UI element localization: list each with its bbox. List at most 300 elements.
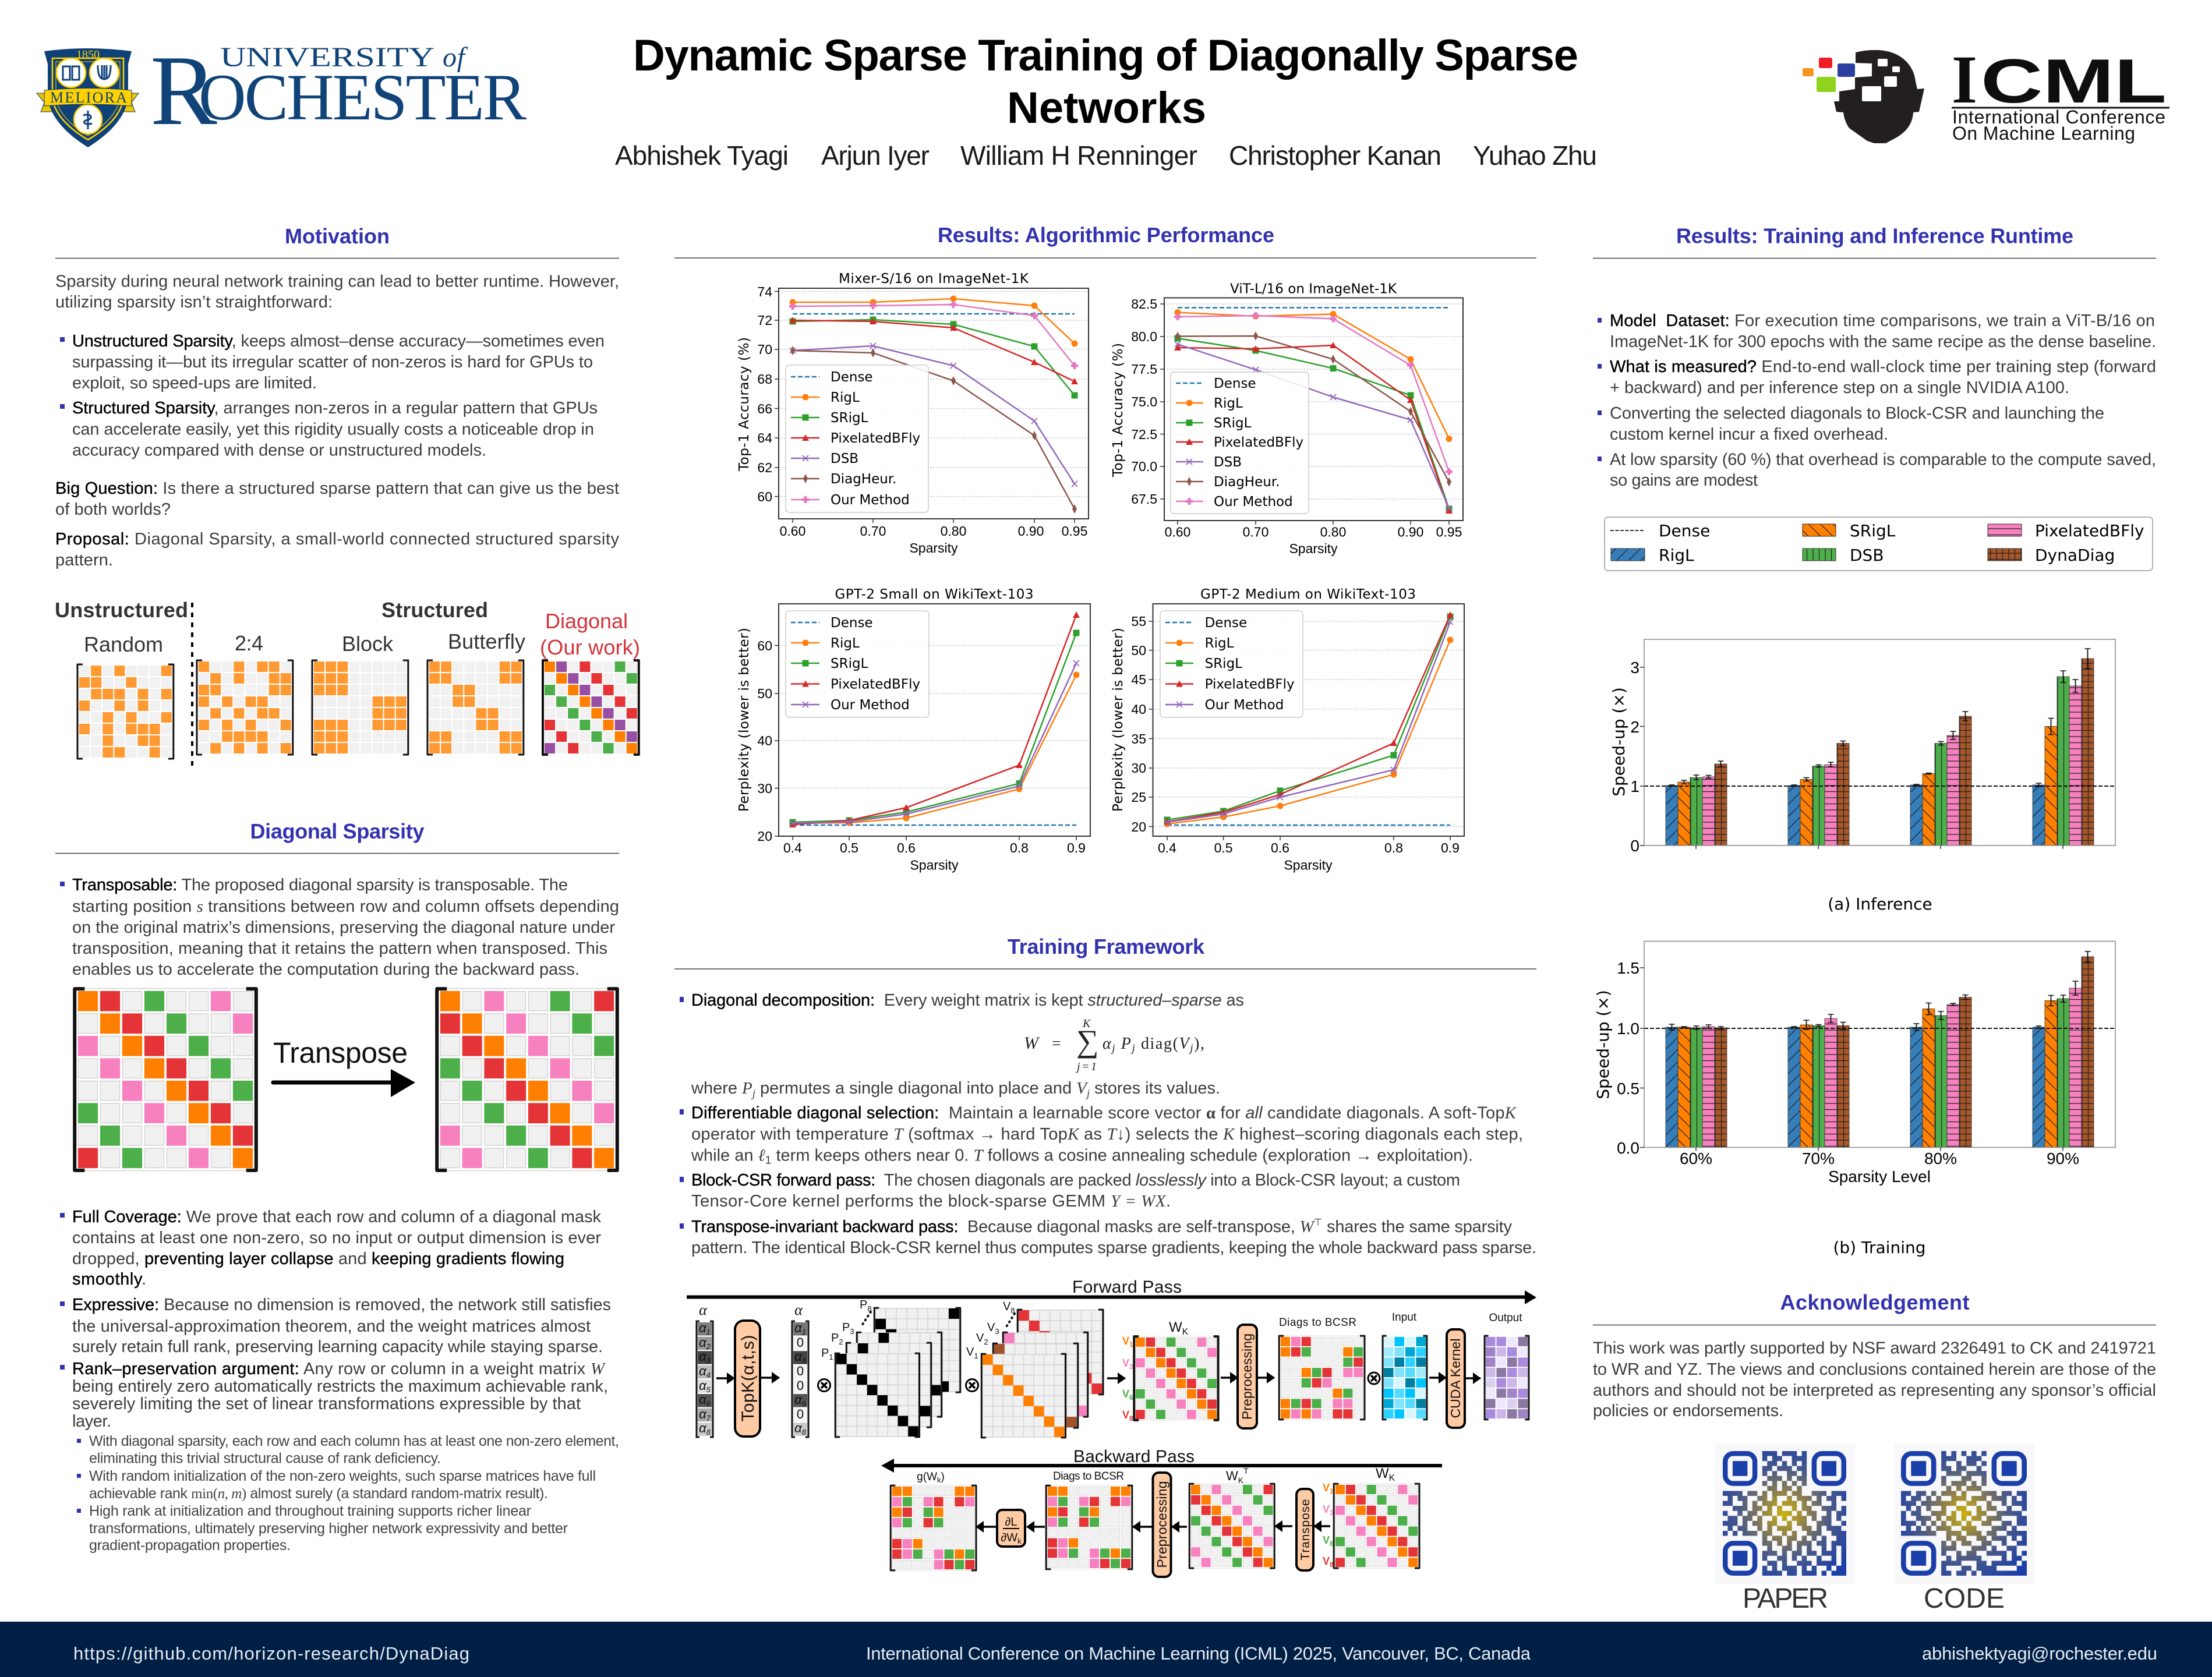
legend: PixelatedBFly: [1205, 677, 1295, 692]
matrix: W_K transpose: [1189, 1466, 1274, 1568]
heading: training and inference runtime: Results: Training and Inference Runtime: [1676, 224, 2073, 248]
matrix: output: [1485, 1312, 1529, 1420]
bullet: transposable: transposition, meaning that it retains the pattern when transposed. This: [72, 939, 607, 958]
stack: permutation matrices: 8: [867, 1304, 872, 1313]
equation: W decomposition: j: [1130, 1042, 1135, 1055]
equation: W decomposition: j: [1188, 1042, 1193, 1055]
chart: ViT-L/16 on ImageNet-1K: [1111, 282, 1463, 556]
chart: inference speed-up: 0: [1630, 837, 1639, 855]
chart: GPT-2 Medium on WikiText-103: Perplexity (lower is better): [1111, 628, 1126, 812]
footer: email: abhishektyagi@rochester.edu: [1922, 1643, 2157, 1664]
bullet: differentiable diagonal selection: Differentiable diagonal selection: Maintain a learnable score vector α for all candidate diagonals. A soft-TopK: [691, 1104, 1517, 1123]
operator: tensor product: [818, 1379, 831, 1392]
bullet: differentiable diagonal selection: 1: [765, 1154, 771, 1167]
chart: Mixer-S/16 on ImageNet-1K: 64: [757, 430, 772, 445]
selected alpha vector: [792, 1301, 808, 1437]
alpha vector: 2: [706, 1342, 711, 1351]
matrix: diagonal: [543, 660, 639, 755]
legend: SRigL: [831, 411, 868, 426]
bullet: expressive: [60, 1296, 611, 1356]
chart: GPT-2 Small on WikiText-103: 50: [757, 686, 772, 701]
figure: sparsity patterns: [55, 598, 640, 767]
stack: value matrices: 3: [995, 1327, 999, 1336]
box: preprocessing: [1238, 1325, 1257, 1428]
matrix: W_K backward: V: [1323, 1534, 1330, 1546]
label: unstructured: Unstructured: [55, 598, 188, 622]
bullet: differentiable diagonal selection: operator with temperature T (softmax → hard TopK as T↓) selects the K highest–scoring diagonals each step,: [691, 1125, 1523, 1144]
chart: Mixer-S/16 on ImageNet-1K: 68: [757, 372, 772, 387]
matrix: gradient g(W_k): k: [937, 1476, 941, 1484]
matrix: W_K transpose: T: [1243, 1466, 1249, 1476]
alpha vector: α: [699, 1421, 707, 1435]
authors: [615, 140, 1597, 171]
matrix: W_K transpose: W: [1226, 1469, 1238, 1483]
arrow: [1027, 1526, 1045, 1528]
stack: permutation matrices: P: [821, 1347, 829, 1360]
chart: GPT-2 Small on WikiText-103: Perplexity (lower is better): [737, 628, 752, 812]
bullet: rank preservation: Rank–preservation argument: Any row or column in a weight matrix W: [72, 1360, 606, 1378]
chart: GPT-2 Medium on WikiText-103: 0.4: [1158, 840, 1176, 855]
chart: GPT-2 Medium on WikiText-103: 35: [1131, 731, 1146, 746]
stack: value matrices: V: [966, 1346, 974, 1358]
chart: Mixer-S/16 on ImageNet-1K: 72: [757, 313, 772, 328]
chart: ViT-L/16 on ImageNet-1K: 75.0: [1131, 394, 1157, 409]
chart: inference speed-up: 3: [1630, 659, 1639, 677]
bullet: full coverage: contains at least one non-zero, so no input or output dimension is ever: [72, 1229, 601, 1247]
matrix: W_K: V: [1122, 1357, 1129, 1369]
chart: training speed-up: 1.0: [1617, 1020, 1639, 1038]
box: TopK: TopK(α,t,s): [738, 1335, 758, 1422]
matrix: butterfly: [427, 660, 524, 755]
chart: GPT-2 Medium on WikiText-103: 0.8: [1384, 840, 1403, 855]
text block: funding: authors and should not be interpreted as representing any sponsor’s official: [1593, 1381, 2156, 1400]
operator: tensor product: [1368, 1372, 1380, 1384]
text block: where clause: j: [1085, 1088, 1090, 1100]
legend: runtime methods: SRigL: [1850, 521, 1896, 540]
bullet: block-csr forward pass: [680, 1171, 1460, 1211]
matrix: block: [312, 660, 408, 755]
box: TopK: [735, 1321, 760, 1437]
matrix: W_K: 3: [1129, 1363, 1133, 1371]
bullet: block-csr forward pass: Tensor-Core kernel performs the block-sparse GEMM Y = WX.: [691, 1192, 1171, 1211]
icon: shield: 1850: [76, 48, 100, 61]
legend: [786, 611, 929, 717]
chart: Mixer-S/16 on ImageNet-1K: 62: [757, 460, 772, 475]
title: [633, 31, 1578, 133]
footer: repository link: https://github.com/horizon-research/DynaDiag: [73, 1643, 469, 1664]
stack: permutation matrices: P: [831, 1332, 839, 1345]
chart: ViT-L/16 on ImageNet-1K: 0.60: [1165, 524, 1190, 539]
bullet: rank preservation: layer.: [72, 1412, 111, 1431]
arrow: [1314, 1525, 1330, 1527]
legend: runtime methods: RigL: [1659, 546, 1694, 565]
bullet: full coverage: smoothly.: [72, 1270, 146, 1289]
legend: Our Method: [1214, 494, 1293, 510]
matrix: diags to BCSR backward: [1046, 1470, 1132, 1569]
bullet: conversion overhead: Converting the selected diagonals to Block-CSR and launching the: [1610, 404, 2104, 423]
chart: GPT-2 Medium on WikiText-103: 55: [1131, 614, 1146, 629]
arrow: [1257, 1377, 1274, 1379]
legend: Our Method: [831, 698, 910, 713]
legend: RigL: [831, 390, 860, 405]
text block: funding: policies or endorsements.: [1593, 1402, 1783, 1420]
title: Dynamic Sparse Training of Diagonally Sparse: [633, 31, 1578, 80]
legend: RigL: [1205, 636, 1234, 651]
selected alpha vector: 0: [797, 1364, 804, 1378]
alpha vector: 4: [706, 1371, 711, 1379]
equation: W decomposition: j: [1110, 1042, 1115, 1055]
chart: ViT-L/16 on ImageNet-1K: 77.5: [1131, 362, 1157, 377]
equation: W decomposition: diag(: [1136, 1035, 1178, 1053]
matrix: input: Input: [1392, 1311, 1417, 1324]
chart: Mixer-S/16 on ImageNet-1K: 60: [757, 489, 772, 504]
label: random: Random: [84, 632, 163, 656]
chart: Mixer-S/16 on ImageNet-1K: 0.70: [860, 523, 886, 539]
heading: training framework: Training Framework: [1008, 935, 1205, 958]
wordmark: ICML I: I: [1952, 41, 1977, 118]
chart: ViT-L/16 on ImageNet-1K: Sparsity: [1289, 541, 1338, 556]
stack: permutation matrices: 1: [829, 1353, 833, 1361]
text block: funding: to WR and YZ. The views and conclusions contained herein are those of the: [1593, 1360, 2156, 1379]
legend: RigL: [831, 636, 860, 651]
bullet: block-csr forward pass: Block-CSR forward pass: The chosen diagonals are packed losslessly into a Block-CSR layout; a custom: [691, 1171, 1460, 1190]
bullet: structured sparsity: accuracy compared with dense or unstructured models.: [72, 441, 486, 460]
authors: Christopher Kanan: [1229, 140, 1441, 171]
label: transpose: Transpose: [273, 1036, 408, 1069]
label: butterfly: Butterfly: [448, 629, 525, 653]
alpha vector: α: [699, 1349, 707, 1364]
bullet: transpose-invariant backward pass: [680, 1217, 1536, 1257]
logo: University of Rochester: [37, 36, 527, 147]
label: backward pass: Backward Pass: [1073, 1447, 1195, 1466]
alpha vector: 7: [706, 1414, 711, 1423]
selected alpha vector: 8: [802, 1428, 807, 1437]
matrix: W_K backward: [1323, 1466, 1419, 1569]
text block: proposal: Proposal: Diagonal Sparsity, a small-world connected structured sparsity: [55, 530, 620, 549]
footer: conference: International Conference on Machine Learning (ICML) 2025, Vancouver, BC, Canada: [866, 1643, 1531, 1664]
bullet: transposable: starting position s transitions between row and column offsets depending: [72, 897, 619, 916]
box: transpose: [1296, 1489, 1313, 1570]
equation: W decomposition: K: [1082, 1017, 1091, 1030]
chart: training speed-up: 90%: [2047, 1149, 2079, 1167]
chart: GPT-2 Small on WikiText-103: 0.4: [783, 840, 802, 855]
arrow: [761, 1377, 779, 1379]
text block: where clause: V: [1076, 1079, 1090, 1100]
arrow: forward pass: [687, 1290, 1536, 1304]
matrix: 2:4: [197, 660, 293, 755]
chart: training speed-up: Sparsity Level: [1828, 1167, 1931, 1186]
matrix: W_K backward: V: [1323, 1482, 1330, 1494]
chart: GPT-2 Medium on WikiText-103: [1111, 587, 1464, 872]
selected alpha vector: 0: [797, 1378, 804, 1393]
legend: SRigL: [1214, 416, 1252, 431]
legend: Dense: [831, 615, 873, 631]
authors: William H Renninger: [960, 140, 1197, 171]
selected alpha vector: α: [794, 1421, 803, 1435]
text block: where clause: stores its values.: [1090, 1079, 1220, 1098]
bullet: low sparsity: [1598, 451, 2156, 490]
matrix: W_K: V: [1122, 1409, 1129, 1421]
text block: intro: Sparsity during neural network training can lead to better runtime. However,: [55, 273, 619, 291]
legend: Our Method: [831, 493, 910, 508]
chart: GPT-2 Small on WikiText-103: 0.5: [840, 840, 858, 855]
bullet: transposable: enables us to accelerate the computation during the backward pass.: [72, 960, 579, 979]
matrix: W_K backward: V: [1323, 1555, 1330, 1567]
alpha vector: 1: [706, 1328, 711, 1336]
chart: training speed-up: 70%: [1802, 1149, 1835, 1167]
matrix: W_K backward: W: [1376, 1466, 1389, 1481]
legend: PixelatedBFly: [1214, 435, 1303, 450]
heading: algorithmic performance: Results: Algorithmic Performance: [938, 223, 1274, 247]
stack: value matrices: 8: [1010, 1306, 1015, 1315]
arrow: [1133, 1526, 1153, 1528]
chart: training speed-up: 0.5: [1617, 1080, 1639, 1098]
caption: inference: (a) Inference: [1828, 894, 1932, 914]
stack: value matrices: V: [987, 1321, 995, 1334]
label: forward pass: Forward Pass: [1072, 1278, 1182, 1297]
bullet: diagonal decomposition: Diagonal decomposition: Every weight matrix is kept structured–sparse as: [691, 991, 1244, 1010]
selected alpha vector: 6: [802, 1399, 807, 1408]
bullet: what is measured: What is measured? End-to-end wall-clock time per training step (forward: [1610, 358, 2156, 376]
bullet: differentiable diagonal selection: while an ℓ: [691, 1146, 765, 1165]
text block: proposal: [55, 530, 620, 569]
chart: ViT-L/16 on ImageNet-1K: 67.5: [1131, 491, 1157, 507]
chart: ViT-L/16 on ImageNet-1K: 0.90: [1398, 524, 1423, 539]
chart: GPT-2 Small on WikiText-103: 0.9: [1067, 840, 1086, 855]
legend: [786, 365, 928, 512]
chart: training speed-up: 1.5: [1617, 959, 1639, 977]
matrix: transposed: [437, 989, 617, 1170]
text block: intro: [55, 273, 619, 312]
panel: header: [37, 31, 2169, 171]
arrow: [1107, 1377, 1125, 1379]
chart: Mixer-S/16 on ImageNet-1K: 0.95: [1062, 523, 1087, 539]
arrow: backward pass: [881, 1459, 1442, 1473]
wordmark: conference name: [1952, 107, 2165, 144]
equation: W decomposition: j=1: [1075, 1060, 1097, 1073]
legend: runtime methods: DSB: [1850, 546, 1884, 565]
label: paper: PAPER: [1743, 1583, 1828, 1614]
authors: Abhishek Tyagi: [615, 140, 789, 171]
alpha vector: α: [699, 1392, 707, 1407]
matrix: W_K: 1: [1129, 1340, 1133, 1349]
matrix: gradient g(W_k): [891, 1471, 976, 1570]
operator: tensor product: [966, 1379, 978, 1392]
bullet: structured sparsity: [60, 399, 598, 460]
bullet: transpose-invariant backward pass: shares the same sparsity: [1322, 1218, 1512, 1236]
bullet: transpose-invariant backward pass: ⊤: [1314, 1217, 1322, 1228]
QR code: paper: [1715, 1444, 1855, 1584]
chart: ViT-L/16 on ImageNet-1K: 0.70: [1243, 524, 1268, 539]
stack: value matrices: 1: [974, 1351, 978, 1360]
stack: value matrices: V: [976, 1332, 984, 1345]
chart: Mixer-S/16 on ImageNet-1K: 0.90: [1018, 523, 1044, 539]
legend: SRigL: [831, 656, 868, 671]
bullet: transposable: [60, 876, 619, 979]
stack: permutation matrices: 3: [850, 1327, 854, 1336]
bullet: differentiable diagonal selection: T follows a cosine annealing schedule (exploration → exploitation).: [974, 1146, 1473, 1165]
selected alpha vector: α: [794, 1392, 803, 1407]
chart: GPT-2 Medium on WikiText-103: 0.9: [1441, 840, 1460, 855]
chart: GPT-2 Medium on WikiText-103: 50: [1131, 643, 1146, 658]
bullet: differentiable diagonal selection: [680, 1104, 1523, 1167]
bullet: structured sparsity: Structured Sparsity, arranges non-zeros in a regular pattern that GPUs: [72, 399, 598, 418]
box: dL over dW_k: ∂W: [1001, 1531, 1017, 1544]
equation: W decomposition: [1024, 1017, 1204, 1073]
chart: Mixer-S/16 on ImageNet-1K: 74: [757, 284, 772, 299]
alpha vector: α: [699, 1301, 708, 1318]
legend: PixelatedBFly: [831, 677, 920, 692]
bullet: structured sparsity: can accelerate easily, yet this rigidity usually costs a noticeable drop in: [72, 420, 594, 439]
legend: RigL: [1214, 396, 1243, 411]
chart: ViT-L/16 on ImageNet-1K: Top-1 Accuracy (%): [1111, 343, 1126, 477]
equation: W decomposition: α: [1103, 1035, 1115, 1055]
legend: runtime methods: PixelatedBFly: [2035, 521, 2144, 540]
selected alpha vector: α: [794, 1349, 803, 1364]
chart: ViT-L/16 on ImageNet-1K: 0.95: [1436, 524, 1462, 539]
alpha vector: α: [699, 1321, 707, 1335]
text block: proposal: pattern.: [55, 551, 113, 569]
text block: where clause: permutes a single diagonal into place and: [755, 1079, 1076, 1098]
arrow: [1465, 1377, 1480, 1379]
matrix: original: [75, 989, 256, 1170]
alpha vector: α: [699, 1407, 707, 1421]
label: structured: Structured: [381, 598, 488, 622]
bullet: transposable: Transposable: The proposed diagonal sparsity is transposable. The: [72, 876, 568, 894]
matrix: output: Output: [1489, 1312, 1522, 1324]
wordmark: R: R: [150, 36, 217, 146]
chart: GPT-2 Small on WikiText-103: Sparsity: [910, 857, 959, 872]
label: diagonal, our work: [540, 609, 640, 659]
legend: DiagHeur.: [831, 472, 896, 487]
bullet: rank preservation: being entirely zero automatically restricts the maximum achievable rank,: [72, 1377, 608, 1396]
legend: Dense: [831, 370, 873, 385]
text block: where clause: j: [751, 1088, 755, 1100]
matrix: W_K backward: K: [1389, 1473, 1395, 1483]
chart: ViT-L/16 on ImageNet-1K: ViT-L/16 on ImageNet-1K: [1230, 282, 1397, 297]
legend: runtime methods: Dense: [1659, 521, 1710, 540]
equation: W decomposition: P: [1121, 1035, 1135, 1055]
arrow: [716, 1377, 734, 1379]
matrix: W_K: 6: [1129, 1393, 1133, 1402]
chart: Mixer-S/16 on ImageNet-1K: Top-1 Accuracy (%): [737, 337, 752, 472]
chart: ViT-L/16 on ImageNet-1K: 82.5: [1131, 296, 1157, 312]
chart: ViT-L/16 on ImageNet-1K: 0.80: [1320, 524, 1346, 539]
arrow: [1221, 1377, 1238, 1379]
panel: motivation: [55, 224, 640, 767]
legend: runtime methods: [1605, 517, 2153, 571]
box: CUDA kernel: CUDA Kernel: [1448, 1338, 1463, 1418]
arrow: transpose: [273, 1069, 415, 1097]
chart: inference speed-up: 2: [1630, 718, 1639, 736]
matrix: random: [77, 664, 174, 759]
chart: Mixer-S/16 on ImageNet-1K: Mixer-S/16 on ImageNet-1K: [839, 271, 1029, 286]
selected alpha vector: 3: [802, 1356, 807, 1365]
sub-bullets: rank details: [77, 1433, 619, 1554]
text block: intro: utilizing sparsity isn’t straightforward:: [55, 293, 333, 312]
bullet: what is measured: [1598, 358, 2156, 397]
chart: Mixer-S/16 on ImageNet-1K: 0.80: [941, 523, 966, 539]
box: transpose: Transpose: [1299, 1499, 1312, 1561]
box: CUDA kernel: [1447, 1329, 1465, 1428]
selected alpha vector: 0: [797, 1407, 804, 1421]
matrix: diags to BCSR: [1279, 1317, 1365, 1420]
matrix: input: [1383, 1311, 1427, 1420]
stack: permutation matrices: P: [860, 1299, 867, 1311]
sub-bullets: rank details: gradient-propagation properties.: [89, 1537, 291, 1554]
bullet: what is measured: + backward) and per inference step on a single NVIDIA A100.: [1610, 378, 2069, 397]
bullet: transposable: on the original matrix’s dimensions, preserving the diagonal nature under: [72, 918, 615, 937]
label: block: Block: [342, 632, 394, 656]
matrix: W_K transpose: K: [1238, 1476, 1244, 1485]
legend: DSB: [1214, 455, 1242, 470]
bullet: full coverage: Full Coverage: We prove that each row and column of a diagonal mask: [72, 1208, 601, 1226]
alpha vector: 8: [706, 1428, 711, 1437]
chart: Mixer-S/16 on ImageNet-1K: [737, 271, 1089, 556]
text block: big question: Big Question: Is there a structured sparse pattern that can give us the best: [55, 479, 619, 498]
equation: W decomposition: =: [1052, 1035, 1061, 1053]
legend: Dense: [1205, 615, 1247, 631]
legend: Dense: [1214, 376, 1256, 391]
bullet: conversion overhead: [1598, 404, 2104, 444]
wordmark: ochester: OCHESTER: [199, 61, 527, 134]
chart: ViT-L/16 on ImageNet-1K: 80.0: [1131, 329, 1157, 344]
wordmark: ICML CML: CML: [1981, 46, 2167, 116]
chart: GPT-2 Medium on WikiText-103: 25: [1131, 790, 1146, 805]
sub-bullets: rank details: High rank at initialization and throughout training supports richer linear: [89, 1503, 531, 1519]
bullet: model dataset: [1598, 312, 2156, 351]
stack: value matrices: 2: [984, 1338, 988, 1346]
chart: Mixer-S/16 on ImageNet-1K: 66: [757, 401, 772, 416]
matrix: W_K: K: [1182, 1327, 1189, 1337]
diagram: backward pass: [881, 1447, 1442, 1577]
QR code: code: [1894, 1444, 2034, 1584]
matrix: W_K backward: V: [1323, 1503, 1330, 1515]
chart: ViT-L/16 on ImageNet-1K: 72.5: [1131, 427, 1157, 442]
legend: PixelatedBFly: [831, 431, 920, 446]
bullet: unstructured sparsity: Unstructured Sparsity, keeps almost–dense accuracy—sometimes even: [72, 332, 605, 351]
chart: GPT-2 Small on WikiText-103: GPT-2 Small on WikiText-103: [835, 587, 1033, 602]
chart: training speed-up: 0.0: [1617, 1139, 1639, 1157]
chart: GPT-2 Medium on WikiText-103: 45: [1131, 672, 1146, 687]
legend: Our Method: [1205, 698, 1284, 713]
chart: Mixer-S/16 on ImageNet-1K: 70: [757, 342, 772, 357]
bullet: rank preservation: severely limiting the set of linear transformations expressible by that: [72, 1395, 581, 1413]
chart: training speed-up: Speed-up (×): [1593, 990, 1613, 1099]
title: Networks: [1007, 83, 1206, 133]
matrix: W_K: 8: [1129, 1414, 1133, 1423]
diagram: forward pass: [687, 1278, 1536, 1438]
equation: W decomposition: W: [1024, 1034, 1040, 1053]
bullet: expressive: Expressive: Because no dimension is removed, the network still satisfies: [72, 1296, 611, 1314]
label: 2:4: 2:4: [235, 631, 263, 655]
box: preprocessing backward: Preprocessing: [1154, 1481, 1169, 1568]
chart: inference speed-up: Speed-up (×): [1609, 687, 1628, 797]
chart: GPT-2 Small on WikiText-103: [737, 587, 1090, 872]
bullet: expressive: the universal-approximation theorem, and the weight matrices almost: [72, 1317, 591, 1336]
equation: W decomposition: ),: [1194, 1035, 1204, 1053]
logo: ICML: [1803, 41, 2169, 144]
matrix: W_K backward: 6: [1330, 1540, 1334, 1548]
box: dL over dW_k: [997, 1510, 1025, 1547]
text block: big question: [55, 479, 619, 519]
wordmark: conference name: International Conference: [1952, 107, 2165, 128]
arrow: [976, 1526, 996, 1528]
footer bar: [0, 1622, 2212, 1677]
chart: training speed-up: [1593, 941, 2115, 1186]
arrow: [1275, 1525, 1292, 1527]
sub-bullets: rank details: transformations, ultimately preserving higher network expressivity and better: [89, 1520, 568, 1537]
